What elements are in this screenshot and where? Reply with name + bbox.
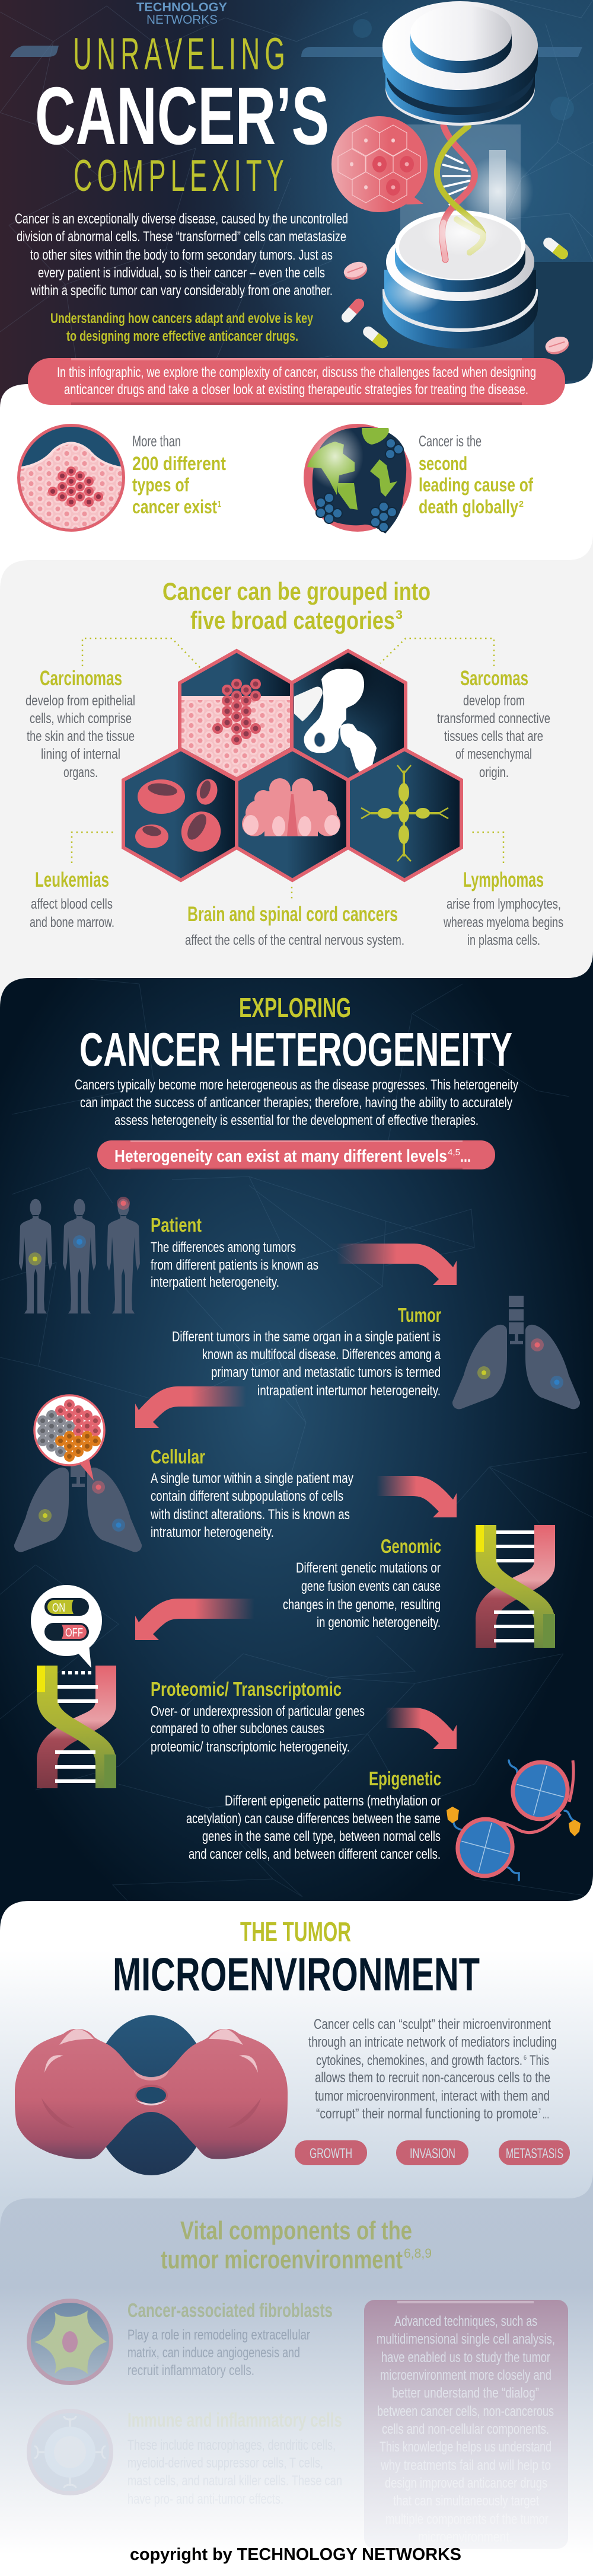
label: carcinomas: the skin and the tissue bbox=[27, 728, 135, 744]
component: immune cells: Immune and inflammatory cells bbox=[127, 2409, 342, 2431]
component: immune cells: myeloid-derived suppressor cells, T cells, bbox=[127, 2455, 323, 2471]
hexagon: sarcomas bbox=[291, 651, 409, 781]
microenvironment text: cytokines, chemokines, and growth factors. bbox=[316, 2053, 522, 2069]
heading: categories: 3 bbox=[396, 608, 403, 622]
stat: second leading cause: second bbox=[419, 453, 467, 474]
stat: 200 different types: 1 bbox=[218, 499, 221, 509]
label: sarcomas bbox=[437, 667, 550, 781]
intro paragraph bbox=[15, 211, 348, 299]
level: genomic bbox=[283, 1535, 441, 1631]
icon: lungs with cell bubble bbox=[14, 1395, 142, 1552]
level: proteomic / transcriptomic: Proteomic/ Transcriptomic bbox=[151, 1678, 342, 1700]
microenvironment text: “corrupt” their normal functioning to promote bbox=[316, 2106, 538, 2122]
level: cellular: with distinct alterations. This is known as bbox=[150, 1507, 350, 1523]
callout: advanced techniques: better understand the “dialog” bbox=[392, 2385, 539, 2401]
heterogeneity intro text: assess heterogeneity is essential for the development of effective therapies. bbox=[114, 1113, 479, 1129]
microenvironment text bbox=[308, 2016, 557, 2122]
hexagon: brain and spinal cord bbox=[237, 749, 348, 880]
callout: many different levels: Heterogeneity can exist at many different levels bbox=[114, 1147, 447, 1166]
label: leukemias: Leukemias bbox=[35, 868, 109, 891]
title: CANCER’S bbox=[35, 71, 329, 162]
heading: categories bbox=[162, 577, 431, 634]
label: sarcomas: origin. bbox=[479, 765, 509, 781]
intro paragraph: every patient is individual, so is their cancer – even the cells bbox=[38, 265, 325, 281]
speech bubble: cancer cells bbox=[331, 116, 428, 212]
component: immune cells: These include macrophages, dendritic cells, bbox=[127, 2437, 336, 2453]
illustration: tumor with stroma bbox=[15, 2015, 288, 2175]
stat: second leading cause: death globally bbox=[419, 496, 518, 517]
panel: five categories bbox=[0, 533, 593, 1008]
microenvironment text: 6 bbox=[524, 2054, 527, 2062]
callout: many different levels: 4,5 bbox=[448, 1148, 460, 1158]
level: cellular: Cellular bbox=[151, 1446, 205, 1468]
level: cellular: intratumor heterogeneity. bbox=[151, 1524, 274, 1541]
icon: tumor tissue bbox=[17, 424, 125, 533]
component: fibroblasts: Play a role in remodeling extracellular bbox=[127, 2327, 310, 2343]
label: lymphomas: in plasma cells. bbox=[467, 932, 540, 948]
icon: globe bbox=[304, 424, 412, 533]
callout: advanced techniques: design improved anticancer drugs bbox=[385, 2475, 547, 2491]
level: proteomic / transcriptomic: compared to other subclones causes bbox=[151, 1721, 324, 1737]
stat: 200 different types: types of bbox=[132, 474, 189, 496]
heading: tumor microenvironment: THE TUMOR bbox=[240, 1916, 351, 1947]
title: UNRAVELING bbox=[73, 29, 290, 79]
label: sarcomas: transformed connective bbox=[437, 711, 550, 727]
label: sarcomas: of mesenchymal bbox=[455, 746, 532, 762]
level: proteomic / transcriptomic: proteomic/ transcriptomic heterogeneity. bbox=[151, 1739, 350, 1755]
icon: immune cell bbox=[27, 2409, 113, 2495]
component: immune cells: mast cells, and natural killer cells. These can bbox=[127, 2473, 342, 2489]
illustration: hourglass drug capsule with DNA bbox=[331, 1, 571, 357]
top cap bbox=[382, 1, 538, 126]
arrow: genomic to proteomic bbox=[135, 1599, 254, 1640]
level: patient: interpatient heterogeneity. bbox=[151, 1274, 279, 1290]
label: lymphomas bbox=[443, 868, 563, 948]
stat: 200 different types: More than bbox=[132, 432, 181, 450]
level: tumor: intrapatient intertumor heterogeneity. bbox=[257, 1383, 441, 1399]
icon: lungs with tumors bbox=[452, 1296, 580, 1409]
level: genomic: in genomic heterogeneity. bbox=[317, 1615, 441, 1631]
dotted connector lines bbox=[72, 638, 503, 900]
light column bbox=[400, 124, 534, 243]
component: immune cells bbox=[127, 2409, 342, 2507]
callout: many different levels bbox=[97, 1140, 495, 1169]
intro highlight: Understanding how cancers adapt and evolve is key bbox=[50, 311, 313, 327]
level: tumor bbox=[172, 1304, 441, 1399]
stat: second leading cause bbox=[419, 432, 533, 517]
heading: vital components: tumor microenvironment bbox=[161, 2245, 403, 2274]
logo: Technology Networks bbox=[136, 1, 227, 27]
label: sarcomas: Sarcomas bbox=[460, 667, 528, 690]
title bbox=[35, 29, 329, 200]
component: fibroblasts: Cancer-associated fibroblasts bbox=[127, 2299, 333, 2321]
panel: cancer heterogeneity bbox=[0, 951, 593, 1932]
intro highlight: to designing more effective anticancer drugs. bbox=[66, 328, 298, 344]
stat: second leading cause: Cancer is the bbox=[419, 432, 482, 450]
icon: on/off switch bubble bbox=[31, 1585, 102, 1668]
level: tumor: Different tumors in the same organ in a single patient is bbox=[172, 1329, 441, 1345]
level: patient: The differences among tumors bbox=[151, 1239, 296, 1255]
title: COMPLEXITY bbox=[74, 151, 289, 200]
icon: fibroblast bbox=[27, 2299, 113, 2385]
label: carcinomas bbox=[25, 667, 135, 781]
panel: white stats bbox=[0, 358, 593, 593]
heading: vital components: Vital components of the bbox=[180, 2216, 412, 2245]
level: tumor: primary tumor and metastatic tumors is termed bbox=[211, 1364, 441, 1380]
pill: invasion: INVASION bbox=[410, 2146, 455, 2162]
pill: metastasis bbox=[499, 2140, 570, 2165]
arrow: cellular to genomic bbox=[377, 1476, 457, 1517]
level: proteomic / transcriptomic: Over- or underexpression of particular genes bbox=[151, 1704, 365, 1720]
intro paragraph: to other sites within the body to form secondary tumors. Just as bbox=[30, 247, 333, 263]
intro paragraph: Cancer is an exceptionally diverse disease, caused by the uncontrolled bbox=[15, 211, 348, 227]
level: genomic: gene fusion events can cause bbox=[301, 1578, 441, 1594]
callout: intro pill bbox=[28, 358, 565, 405]
icon: patients bbox=[19, 1197, 140, 1313]
label: lymphomas: Lymphomas bbox=[463, 868, 544, 891]
stat: 200 different types: cancer exist bbox=[132, 496, 217, 517]
label: leukemias bbox=[30, 868, 114, 931]
level: epigenetic bbox=[186, 1768, 441, 1862]
callout: advanced techniques: that can simultaneously target bbox=[393, 2493, 539, 2509]
hexagon: carcinomas bbox=[178, 651, 296, 782]
DNA helix bbox=[437, 126, 483, 260]
label: carcinomas: develop from epithelial bbox=[25, 693, 135, 709]
logo: Technology Networks: TECHNOLOGY bbox=[136, 1, 227, 14]
label: carcinomas: organs. bbox=[63, 765, 98, 781]
level: genomic: changes in the genome, resulting bbox=[283, 1597, 441, 1613]
pill: metastasis: METASTASIS bbox=[506, 2146, 563, 2162]
callout: advanced techniques: microenvironment. bbox=[418, 2529, 512, 2545]
label: brain and spinal cord cancers bbox=[185, 903, 404, 948]
label: carcinomas: Carcinomas bbox=[40, 667, 122, 690]
level: cellular: contain different subpopulations of cells bbox=[151, 1488, 343, 1504]
icon: on/off switch bubble: OFF bbox=[65, 1626, 83, 1639]
bottom pedestal bbox=[382, 210, 538, 349]
stat: 200 different types: 200 different bbox=[132, 453, 226, 474]
arrow: patient to tumor bbox=[337, 1244, 457, 1285]
intro highlight bbox=[50, 311, 313, 344]
heterogeneity intro text bbox=[75, 1077, 518, 1129]
component: fibroblasts: recruit inflammatory cells. bbox=[127, 2363, 254, 2379]
intro paragraph: division of abnormal cells. These “transformed” cells can metastasize bbox=[17, 229, 346, 245]
component: fibroblasts bbox=[127, 2299, 333, 2379]
arrow: proteomic to epigenetic bbox=[385, 1708, 457, 1749]
icon: nucleosomes bbox=[447, 1756, 581, 1882]
icon: on/off switch bubble: ON bbox=[52, 1602, 65, 1615]
icon: DNA proteomic bbox=[37, 1666, 116, 1788]
panel: vital components bbox=[0, 2172, 593, 2576]
icon: DNA genomic bbox=[476, 1525, 555, 1648]
level: epigenetic: Different epigenetic patterns (methylation or bbox=[225, 1793, 441, 1809]
pill: growth: GROWTH bbox=[310, 2146, 352, 2162]
label: brain and spinal cord cancers: affect the cells of the central nervous system. bbox=[185, 932, 404, 948]
heading: categories: Cancer can be grouped into bbox=[162, 577, 431, 605]
copyright footer: copyright by TECHNOLOGY NETWORKS bbox=[130, 2545, 461, 2564]
level: patient: Patient bbox=[151, 1214, 202, 1236]
level: epigenetic: acetylation) can cause differences between the same bbox=[186, 1811, 441, 1827]
stat: second leading cause: 2 bbox=[519, 499, 524, 509]
callout: advanced techniques: why treatments fail and will help to bbox=[380, 2457, 551, 2473]
level: tumor: Tumor bbox=[398, 1304, 441, 1326]
level: epigenetic: and cancer cells, and between different cancer cells. bbox=[189, 1846, 441, 1862]
heading: cancer heterogeneity: EXPLORING bbox=[239, 992, 351, 1023]
panel: tumor microenvironment bbox=[0, 1874, 593, 2229]
heading: tumor microenvironment bbox=[113, 1916, 480, 2000]
callout: advanced techniques: Advanced techniques, such as bbox=[394, 2313, 537, 2329]
label: sarcomas: tissues cells that are bbox=[444, 728, 543, 744]
stat: 200 different types bbox=[132, 432, 226, 517]
callout: advanced techniques: multiple components of the tumor bbox=[385, 2511, 549, 2527]
level: epigenetic: Epigenetic bbox=[369, 1768, 441, 1789]
hexagon: leukemias bbox=[123, 749, 237, 880]
callout: advanced techniques bbox=[364, 2300, 568, 2549]
component: fibroblasts: matrix, can induce angiogenesis and bbox=[127, 2345, 300, 2361]
level: proteomic / transcriptomic bbox=[151, 1678, 365, 1755]
microenvironment text: ... bbox=[543, 2106, 549, 2122]
intro paragraph: within a specific tumor can vary considerably from one another. bbox=[30, 283, 333, 299]
level: cellular: A single tumor within a single patient may bbox=[151, 1471, 353, 1487]
callout: many different levels: ... bbox=[460, 1147, 471, 1166]
heading: cancer heterogeneity bbox=[79, 992, 512, 1076]
level: epigenetic: genes in the same cell type, between normal cells bbox=[202, 1829, 441, 1845]
network background lines bbox=[0, 978, 593, 1901]
pills bbox=[339, 235, 571, 357]
label: carcinomas: lining of internal bbox=[41, 746, 120, 762]
pill: growth bbox=[295, 2140, 367, 2165]
stat: second leading cause: leading cause of bbox=[419, 474, 533, 496]
label: leukemias: and bone marrow. bbox=[30, 915, 114, 931]
level: patient bbox=[151, 1214, 318, 1290]
microenvironment text: 7 bbox=[538, 2108, 541, 2115]
label: brain and spinal cord cancers: Brain and spinal cord cancers bbox=[187, 903, 398, 926]
label: sarcomas: develop from bbox=[463, 693, 525, 709]
label: carcinomas: cells, which comprise bbox=[30, 711, 132, 727]
level: genomic: Genomic bbox=[381, 1535, 441, 1557]
hexagon: lymphomas bbox=[348, 749, 461, 880]
level: tumor: known as multifocal disease. Differences among a bbox=[202, 1347, 441, 1363]
level: cellular bbox=[150, 1446, 353, 1541]
level: patient: from different patients is known as bbox=[151, 1257, 318, 1273]
logo: Technology Networks: NETWORKS bbox=[146, 13, 218, 27]
pill: invasion bbox=[396, 2140, 468, 2165]
label: lymphomas: arise from lymphocytes, bbox=[447, 896, 561, 912]
label: leukemias: affect blood cells bbox=[31, 896, 113, 912]
arrow: tumor to cellular bbox=[135, 1386, 246, 1428]
heading: categories: five broad categories bbox=[190, 606, 395, 634]
panel: header background bbox=[0, 0, 593, 415]
heading: vital components: 6,8,9 bbox=[404, 2246, 432, 2261]
level: genomic: Different genetic mutations or bbox=[296, 1560, 441, 1576]
microenvironment text: This bbox=[530, 2053, 549, 2069]
component: immune cells: have pro- and anti-tumor effects. bbox=[127, 2491, 283, 2507]
heading: vital components bbox=[161, 2216, 432, 2274]
